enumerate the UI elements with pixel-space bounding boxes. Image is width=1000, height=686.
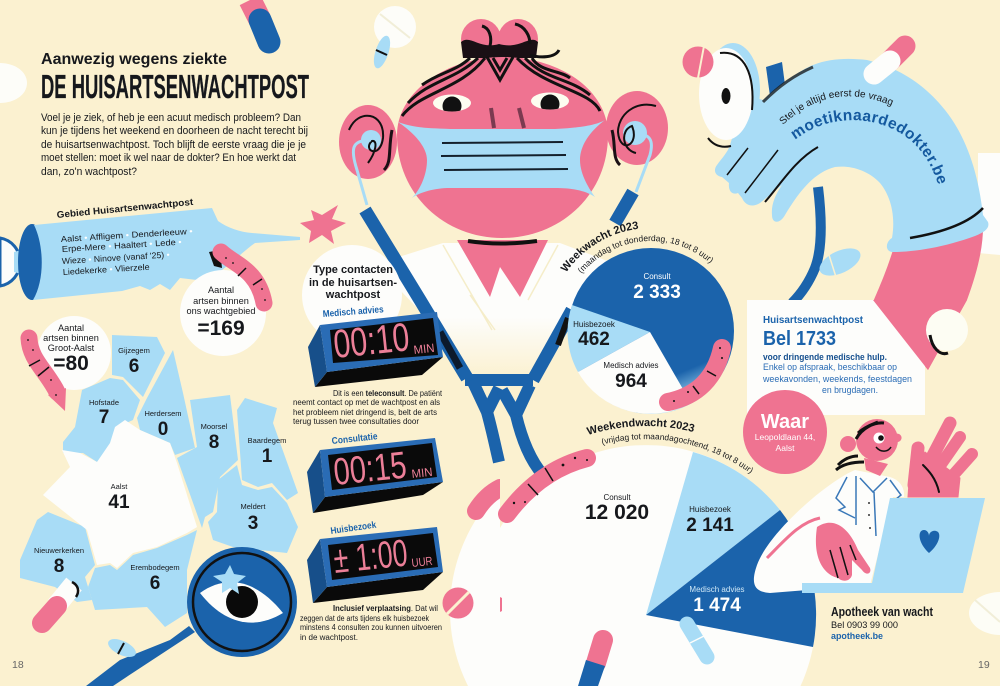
eye (200, 582, 283, 623)
text: verplaatsing (300, 604, 442, 642)
timer: 1 hour: UUR (411, 554, 433, 570)
timer: 10 min: MIN (413, 341, 435, 357)
laptop base (802, 583, 963, 593)
glove text: Stel je altijd eerst de vraag (780, 90, 894, 124)
intro text: kun je tijdens het weekend en doorheen de nacht terecht bij (41, 125, 308, 137)
hand on laptop (767, 518, 870, 581)
hair lines (402, 24, 600, 116)
heading: kicker: Aanwezig wegens ziekte (41, 51, 227, 68)
pharmacy text: Bel 0903 99 000 (831, 620, 898, 631)
timer: 1 hour (307, 527, 443, 603)
pharmacy text: Apotheek van wacht (831, 605, 934, 619)
callout: doctors in Groot-Aalst (37, 316, 111, 390)
nose (892, 433, 902, 442)
pill: pink and white capsule top right (874, 46, 905, 74)
municipalities list: Aalst • Affligem • Denderleeuw • (61, 226, 193, 244)
timer: 10 min: 00:10 (331, 315, 412, 367)
heading: contact types: wachtpost (325, 289, 381, 301)
municipalities list: Erpe-Mere • Haaltert • Lede • (62, 237, 182, 254)
map numbers (54, 356, 273, 594)
pill: pink on fold (442, 588, 474, 618)
syringe title: Gebied Huisartsenwachtpost (56, 197, 195, 221)
handle (86, 626, 195, 686)
text: verplaatsing: Inclusief verplaatsing. Dat wil (333, 604, 438, 613)
intro text: de huisartsenwachtpost. Toch blijft de eerste vraag die je je (41, 139, 306, 151)
otoscope lens (706, 43, 760, 137)
timer: 10 min (308, 312, 443, 387)
pie title: Weekendwacht 2023 (586, 418, 694, 434)
bandage: left of fold (476, 488, 500, 511)
pie subtitle: (vrijdag tot maandagochtend, 18 tot 8 uur) (602, 434, 753, 474)
area: Herdersem (137, 350, 195, 455)
slice label: huisbezoek: Huisbezoek (689, 505, 732, 514)
eyes (433, 92, 569, 112)
slice label: consult: Consult (643, 272, 671, 281)
blue tube (792, 187, 821, 303)
intro text: Voel je je ziek, of heb je een acuut medisch probleem? Dan (41, 112, 301, 124)
map numbers: 1 (262, 446, 273, 467)
pill: light blue capsule (815, 243, 865, 281)
pie subtitle: (maandag tot donderdag, 18 tot 8 uur) (578, 234, 713, 274)
shirt buttons (868, 502, 871, 529)
callout: waar: Waar (761, 411, 809, 433)
ear (840, 436, 856, 452)
page number left: 18 (12, 659, 24, 671)
neck (457, 240, 548, 297)
page number right: 19 (978, 659, 990, 671)
callout: doctors in service area: Aantal (208, 285, 234, 295)
area: Nieuwerkerken (20, 512, 95, 602)
slice label: consult: Consult (603, 493, 631, 502)
area: Gijzegem (112, 335, 165, 397)
magnifier with eye (86, 547, 297, 686)
pie title: Weekwacht 2023 (560, 222, 638, 272)
stat: 169: =169 (197, 317, 245, 340)
callout: doctors in service area: artsen binnen (193, 296, 249, 306)
pill: pink half near lens (682, 46, 714, 78)
intro text: moet stellen: moet ik wel naar de dokter? En hoe werkt dat (41, 152, 296, 164)
text: teleconsult: terug tussen twee consultaties door (293, 417, 419, 426)
callout: waar (743, 390, 827, 474)
intro text: dan, zo'n wachtpost? (41, 166, 137, 178)
pie: weekend left page part (450, 498, 500, 686)
coat and arm (754, 470, 904, 593)
timer: 1 hour: ± 1:00 (332, 532, 410, 582)
map numbers: 6 (150, 573, 160, 594)
ear left (339, 105, 397, 205)
map labels: Erembodegem (130, 563, 180, 572)
pill: white left edge (0, 63, 27, 103)
neck (864, 458, 888, 476)
slice label: huisbezoek (573, 320, 616, 350)
slice label: medisch advies: Medisch advies (603, 361, 659, 370)
shirt lines (836, 476, 901, 536)
slice label: consult: 2 333 (633, 282, 681, 303)
panel: contact types (293, 245, 443, 642)
description: weekavonden, weekends, feestdagen (762, 374, 912, 384)
text: teleconsult: het probleem niet dringend is, belt de arts (293, 408, 437, 417)
title block (41, 51, 309, 178)
area: Hofstade (63, 378, 140, 462)
map labels: Baardegem (248, 436, 286, 445)
timer: 15 min: MIN (411, 465, 433, 481)
worm bandage right (209, 250, 266, 303)
star (213, 565, 246, 594)
bun (461, 19, 538, 59)
glove arm (699, 43, 1000, 370)
map labels: Aalst (111, 482, 128, 491)
text: teleconsult: neemt contact op met de wachtpost en als (293, 398, 440, 407)
heading: contact types: in de huisartsen- (309, 277, 397, 289)
map numbers: 41 (108, 492, 130, 513)
raised hand (908, 423, 972, 497)
slice label: huisbezoek: Huisbezoek (573, 320, 616, 329)
otoscope back (766, 62, 785, 96)
municipalities list: Wieze • Ninove (vanaf '25) • (62, 249, 170, 266)
map labels: Hofstade (89, 398, 119, 407)
phone number: Bel 1733 (763, 328, 836, 350)
slice label: huisbezoek (686, 505, 734, 536)
text: verplaatsing: in de wachtpost. (300, 633, 358, 642)
map numbers: 3 (248, 513, 258, 534)
map labels: Moorsel (201, 422, 228, 431)
nose (491, 108, 524, 128)
slice label: huisbezoek: 462 (578, 329, 610, 350)
face details (874, 432, 891, 451)
icon: heart (920, 530, 939, 553)
label: medisch advies: Medisch advies (322, 304, 384, 320)
map: Groot-Aalst sub-areas (20, 335, 298, 627)
map numbers: 7 (99, 407, 109, 428)
description: en brugdagen. (822, 385, 878, 395)
map labels: Herdersem (144, 409, 182, 418)
pink arm (873, 220, 983, 370)
pharmacy text (831, 605, 934, 642)
description: Enkel op afspraak, beschikbaar op (763, 362, 897, 372)
map numbers: 0 (158, 419, 168, 440)
white coat (383, 243, 610, 378)
face (397, 57, 608, 238)
callout: doctors in Groot-Aalst: artsen binnen (43, 333, 99, 343)
timer: 15 min (307, 438, 443, 513)
pill: pink and blue capsule bottom (578, 640, 605, 686)
pharmacy text: apotheek.be (831, 631, 883, 642)
heading: contact types: Type contacten (313, 264, 393, 276)
area: Erembodegem (88, 530, 197, 627)
bandage: week pie (668, 347, 723, 402)
map numbers: 8 (54, 556, 64, 577)
slice label: medisch advies (689, 585, 745, 616)
slice label: medisch advies: 964 (615, 371, 647, 392)
heading: Huisartsenwachtpost (763, 315, 864, 326)
callout: doctors in Groot-Aalst: Aantal (58, 323, 84, 333)
laptop (872, 498, 985, 593)
label: consultatie: Consultatie (331, 431, 378, 447)
pill: pink and blue capsule top (250, 0, 269, 42)
intro text (41, 112, 308, 178)
head (856, 419, 898, 461)
pie chart: weekend (500, 418, 816, 686)
map labels (34, 346, 286, 572)
map numbers: 8 (209, 432, 219, 453)
hair (836, 422, 884, 470)
pill: white round and light capsule (371, 6, 416, 70)
callout: doctors in Groot-Aalst: Groot-Aalst (48, 343, 95, 353)
stethoscope (365, 192, 633, 475)
slice label: consult: 12 020 (585, 501, 649, 524)
pie chart: weekwacht (560, 222, 734, 414)
callout: waar: Leopoldlaan 44, (755, 432, 815, 442)
label: huisbezoek: Huisbezoek (330, 520, 378, 537)
white blob right edge (978, 153, 1000, 255)
pill: white and pink capsule (42, 582, 78, 623)
text: verplaatsing: minstens 4 consulten zou kunnen uitvoeren (300, 623, 442, 632)
heading: main title: DE HUISARTSENWACHTPOST (41, 68, 309, 105)
municipalities list: Liedekerke • Vlierzele (63, 262, 150, 277)
text: teleconsult (293, 389, 443, 426)
map labels: Meldert (240, 502, 266, 511)
worm bandage left (27, 338, 66, 411)
glove (715, 59, 988, 252)
slice label: medisch advies: Medisch advies (689, 585, 745, 594)
slice label: medisch advies: 1 474 (693, 595, 741, 616)
area: Aalst (43, 420, 197, 568)
callout: doctors in service area: ons wachtgebied (187, 306, 255, 316)
callout: doctors in service area (180, 270, 266, 356)
syringe handle (0, 224, 46, 300)
heading: contact types (309, 264, 397, 301)
map labels: Gijzegem (118, 346, 150, 355)
finger lines and shadows (727, 67, 983, 238)
text: verplaatsing: zeggen dat de arts tijdens elk huisbezoek (300, 614, 430, 623)
slice label: medisch advies (603, 361, 659, 392)
map numbers: 6 (129, 356, 139, 377)
callout: waar: Aalst (776, 443, 795, 453)
website: moetiknaardedokter.be (791, 110, 946, 184)
star burst (300, 205, 346, 244)
ear right (606, 91, 668, 192)
slice label: consult (633, 272, 681, 303)
area: Meldert (208, 465, 298, 553)
face mask (398, 120, 605, 198)
stat: 80: =80 (53, 352, 89, 375)
pill: white bottom right (969, 592, 1000, 635)
municipalities list (61, 226, 193, 277)
bandage: weekend pie (507, 457, 588, 514)
syringe barrel (33, 208, 300, 300)
description: voor dringende medische hulp. (763, 352, 887, 362)
panel: syringe with service area (0, 197, 300, 300)
pill: light blue capsule (687, 624, 707, 657)
area: Moorsel (177, 395, 238, 528)
text: teleconsult: Dit is een teleconsult. De patiënt (333, 389, 443, 398)
lens (187, 547, 297, 657)
doctor at laptop (754, 419, 985, 593)
slice label: huisbezoek: 2 141 (686, 515, 734, 536)
description (762, 352, 912, 395)
pill: small light capsule (105, 635, 139, 661)
area: Baardegem (237, 398, 298, 500)
timer: 15 min: 00:15 (332, 445, 409, 494)
panel: info box (747, 300, 968, 415)
map labels: Nieuwerkerken (34, 546, 84, 555)
doctor head (339, 19, 668, 238)
